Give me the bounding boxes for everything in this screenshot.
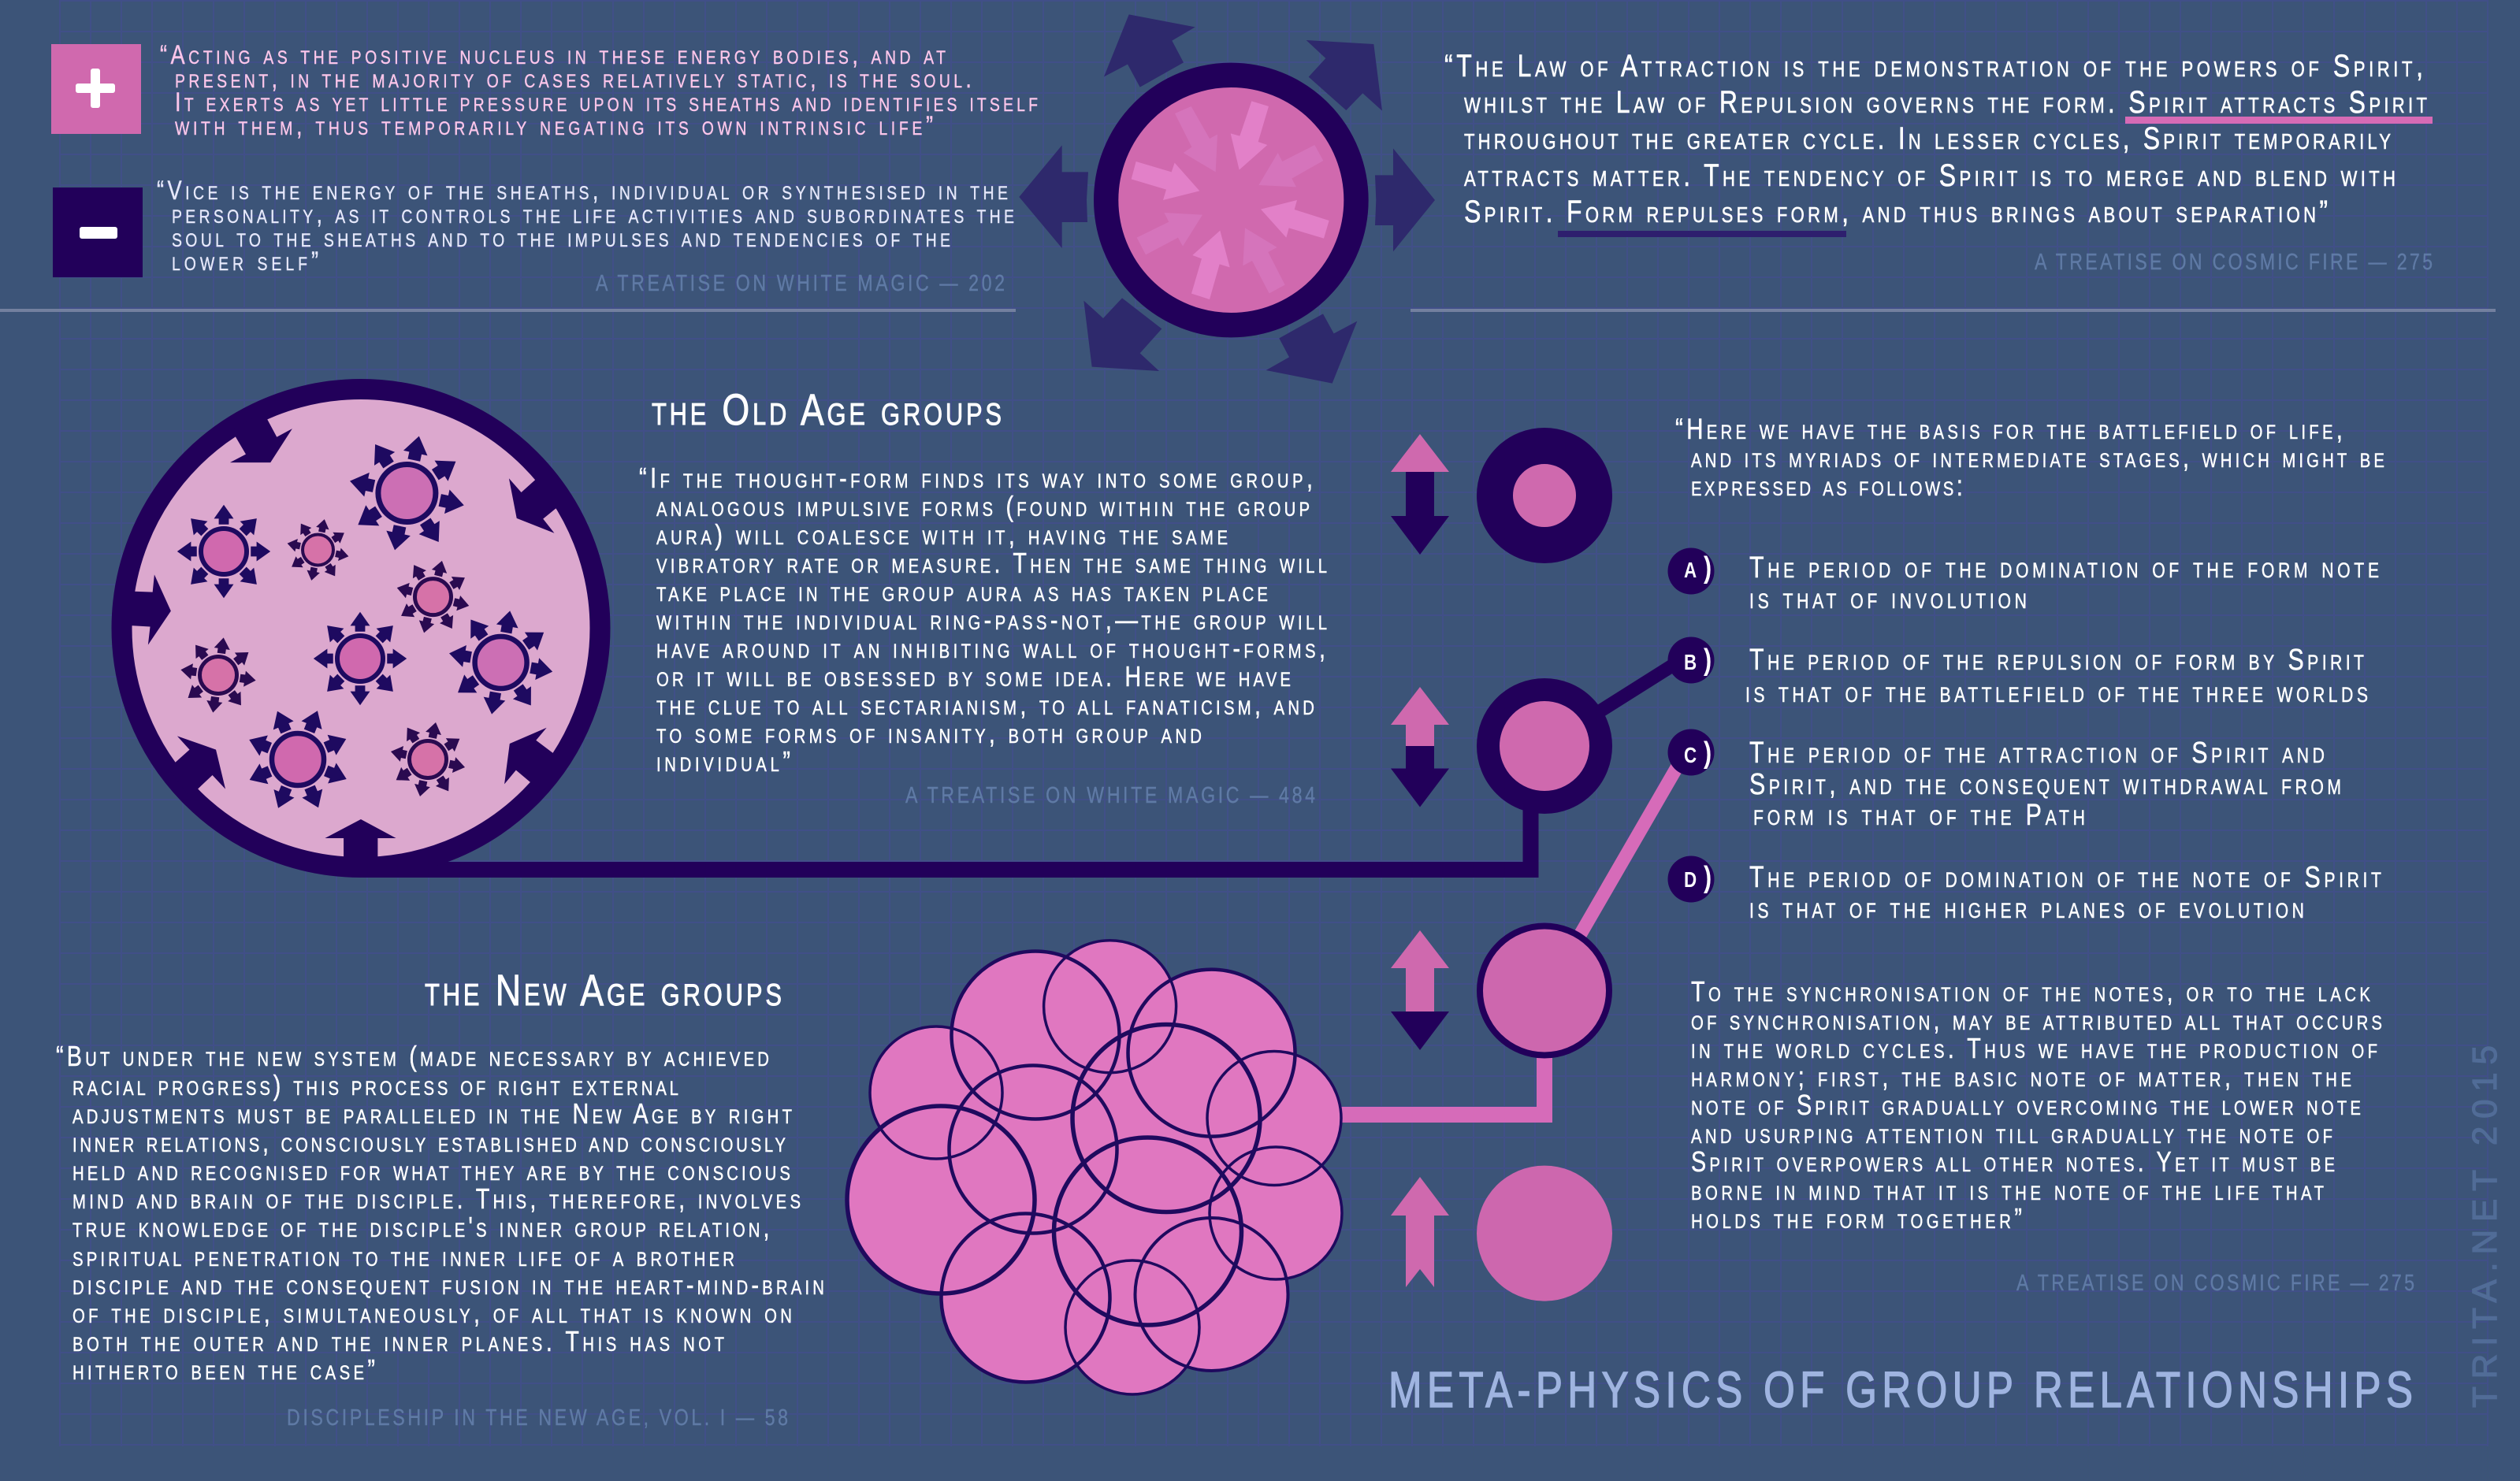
arrow: balanced bbox=[1391, 687, 1449, 807]
source: white magic 484: A TREATISE ON WHITE MAGIC — 484 bbox=[905, 781, 1315, 808]
item C: Spirit, and the consequent withdrawal from bbox=[1749, 768, 2341, 801]
quote: law of attraction: “The Law of Attraction is the demonstration of the powers of Spirit, bbox=[1444, 48, 2423, 84]
quote: law of attraction: Spirit. Form repulses form, and thus brings about separation” bbox=[1464, 194, 2328, 229]
quote: vice: personality, as it controls the life activities and subordinates the bbox=[172, 199, 1014, 229]
item D: is that of the higher planes of evolution bbox=[1749, 892, 2304, 925]
old age group circle bbox=[121, 389, 600, 867]
item A bbox=[1749, 551, 2379, 615]
outer arrows bbox=[1019, 14, 1435, 384]
quote: new system: mind and brain of the disciple. This, therefore, involves bbox=[72, 1182, 801, 1215]
member cell 3 bbox=[281, 513, 355, 587]
quote: synchronisation: note of Spirit gradually overcoming the lower note bbox=[1691, 1089, 2361, 1121]
source: discipleship 58: DISCIPLESHIP IN THE NEW AGE, VOL. I — 58 bbox=[287, 1404, 788, 1431]
underline: spirit attracts spirit bbox=[2125, 117, 2433, 124]
quote: new system bbox=[56, 1040, 824, 1386]
credit: vertical watermark: TRITA.NET 2015 bbox=[2466, 1045, 2504, 1408]
quote: thought-form: analogous impulsive forms (found within the group bbox=[656, 490, 1310, 522]
quote: thought-form bbox=[639, 462, 1327, 778]
quote: new system: true knowledge of the disciple's inner group relation, bbox=[72, 1211, 769, 1243]
badge B: B) bbox=[1684, 644, 1712, 677]
quote: synchronisation: and usurping attention till gradually the note of bbox=[1691, 1117, 2332, 1149]
member cell 8 bbox=[229, 691, 366, 828]
quote: new system: adjustments must be paralleled in the New Age by right bbox=[72, 1097, 792, 1130]
item C: form is that of the Path bbox=[1753, 799, 2085, 832]
quote: thought-form: or it will be obsessed by some idea. Here we have bbox=[656, 660, 1291, 692]
item D bbox=[1749, 861, 2381, 925]
quote: new system: inner relations, consciously established and consciously bbox=[72, 1126, 786, 1158]
arrow: mostly upward bbox=[1391, 930, 1449, 1050]
quote: new system: “But under the new system (made necessary by achieved bbox=[56, 1040, 769, 1072]
quote: vice: lower self” bbox=[172, 246, 318, 277]
connector: old age bar bbox=[362, 788, 1530, 870]
arrow: upward only bbox=[1391, 1177, 1449, 1287]
badge B bbox=[1667, 637, 1715, 684]
quote: positive nucleus: present, in the majority of cases relatively static, is the soul. bbox=[175, 63, 972, 94]
source: cosmic fire 275 top: A TREATISE ON COSMIC FIRE — 275 bbox=[2035, 248, 2433, 275]
quote: synchronisation: To the synchronisation of the notes, or to the lack bbox=[1691, 975, 2371, 1008]
quote: new system: both the outer and the inner planes. This has not bbox=[72, 1325, 724, 1357]
quote: thought-form: individual” bbox=[656, 745, 790, 778]
new age group cluster bbox=[847, 941, 1342, 1394]
item C: The period of the attraction of Spirit and bbox=[1749, 737, 2325, 770]
icon: minus square bbox=[53, 187, 143, 277]
quote: law of attraction bbox=[1444, 48, 2427, 229]
quote: battlefield: and its myriads of intermediate stages, which might be bbox=[1691, 442, 2384, 474]
quote: synchronisation: of synchronisation, may be attributed all that occurs bbox=[1691, 1004, 2382, 1036]
member cell 7 bbox=[176, 633, 261, 718]
item B: is that of the battlefield of the three worlds bbox=[1745, 676, 2368, 709]
badge D bbox=[1667, 856, 1715, 903]
member cell 1 bbox=[338, 424, 476, 562]
connector: pink line to badge C bbox=[1580, 763, 1679, 935]
quote: thought-form: the clue to all sectarianism, to all fanaticism, and bbox=[656, 689, 1314, 721]
quote: battlefield: expressed as follows: bbox=[1691, 470, 1963, 503]
quote: positive nucleus: “Acting as the positive nucleus in these energy bodies, and at bbox=[160, 39, 946, 70]
quote: law of attraction: attracts matter. The tendency of Spirit is to merge and blend with bbox=[1464, 158, 2395, 193]
inner arrows bright bbox=[1132, 101, 1329, 299]
badge C: C) bbox=[1684, 737, 1712, 770]
underline: form repulses form bbox=[1558, 231, 1846, 237]
member cell 5 bbox=[314, 612, 407, 705]
quote: new system: disciple and the consequent fusion in the heart-mind-brain bbox=[72, 1268, 824, 1301]
quote: thought-form: take place in the group aura as has taken place bbox=[656, 575, 1268, 607]
divider left bbox=[0, 309, 1016, 312]
quote: synchronisation: in the world cycles. Thus we have the production of bbox=[1691, 1032, 2377, 1064]
badge A: A) bbox=[1684, 551, 1712, 585]
quote: vice: “Vice is the energy of the sheaths, individual or synthesised in the bbox=[157, 175, 1008, 206]
member cell 2 bbox=[177, 505, 270, 598]
quote: thought-form: have around it an inhibiting wall of thought-forms, bbox=[656, 632, 1325, 664]
member cell 9 bbox=[383, 715, 473, 804]
quote: positive nucleus: with them, thus temporarily negating its own intrinsic life” bbox=[175, 110, 933, 141]
quote: new system: held and recognised for what they are by the conscious bbox=[72, 1154, 790, 1186]
quote: new system: hitherto been the case” bbox=[72, 1353, 375, 1386]
stage circle 4 bbox=[1477, 1166, 1612, 1301]
quote: thought-form: aura) will coalesce with it, having the same bbox=[656, 518, 1228, 551]
quote: synchronisation: harmony; first, the basic note of matter, then the bbox=[1691, 1060, 2351, 1093]
badge C bbox=[1667, 729, 1715, 775]
inner arrows soft bbox=[1137, 106, 1323, 293]
inward arrows bbox=[126, 412, 566, 863]
disc bbox=[121, 389, 600, 867]
item A: The period of the domination of the form note bbox=[1749, 551, 2379, 585]
icon: plus square bbox=[51, 44, 141, 134]
quote: vice: soul to the sheaths and to the impulses and tendencies of the bbox=[172, 222, 950, 253]
quote: synchronisation: holds the form together” bbox=[1691, 1202, 2022, 1234]
quote: new system: of the disciple, simultaneously, of all that is known on bbox=[72, 1297, 792, 1329]
title: META-PHYSICS OF GROUP RELATIONSHIPS bbox=[1388, 1363, 2413, 1418]
central radiating soul diagram bbox=[1019, 14, 1435, 384]
stage circle 3 bbox=[1480, 926, 1609, 1056]
quote: new system: spiritual penetration to the inner life of a brother bbox=[72, 1240, 734, 1272]
quote: battlefield: “Here we have the basis for the battlefield of life, bbox=[1675, 414, 2343, 446]
quote: vice bbox=[157, 175, 1014, 277]
connector: dark line to badge B bbox=[1576, 662, 1678, 726]
source: cosmic fire 275 bottom: A TREATISE ON COSMIC FIRE — 275 bbox=[2016, 1269, 2414, 1296]
heading: new age groups: the New Age groups bbox=[425, 965, 782, 1015]
quote: synchronisation: Spirit overpowers all other notes. Yet it must be bbox=[1691, 1145, 2335, 1178]
quote: law of attraction: whilst the Law of Repulsion governs the form. Spirit attracts Spirit bbox=[1464, 84, 2427, 120]
badge D: D) bbox=[1684, 861, 1712, 894]
quote: synchronisation bbox=[1691, 975, 2382, 1234]
quote: thought-form: to some forms of insanity, both group and bbox=[656, 717, 1202, 749]
stage circle 2 bbox=[1488, 690, 1601, 802]
divider right bbox=[1411, 309, 2496, 312]
quote: synchronisation: borne in mind that it is the note of the life that bbox=[1691, 1174, 2324, 1206]
item B bbox=[1745, 644, 2368, 709]
item D: The period of domination of the note of Spirit bbox=[1749, 861, 2381, 894]
item C bbox=[1749, 737, 2341, 832]
quote: law of attraction: throughout the greater cycle. In lesser cycles, Spirit temporarily bbox=[1464, 121, 2391, 156]
quote: thought-form: vibratory rate or measure. Then the same thing will bbox=[656, 547, 1327, 579]
quote: thought-form: within the individual ring-pass-not,—the group will bbox=[656, 603, 1327, 636]
quote: positive nucleus bbox=[160, 39, 1038, 141]
member cell 6 bbox=[440, 602, 562, 723]
stage circle 1 bbox=[1495, 446, 1594, 545]
item B: The period of the repulsion of form by Spirit bbox=[1749, 644, 2364, 677]
connector: pink line from cluster to circle bbox=[1332, 1048, 1544, 1115]
badge A bbox=[1667, 548, 1715, 594]
arrow: mostly downward bbox=[1391, 434, 1449, 555]
quote: positive nucleus: It exerts as yet little pressure upon its sheaths and identifies itself bbox=[175, 87, 1038, 117]
item A: is that of involution bbox=[1749, 582, 2027, 615]
member cell 4 bbox=[388, 551, 478, 642]
quote: thought-form: “If the thought-form finds its way into some group, bbox=[639, 462, 1313, 494]
heading: old age groups: the Old Age groups bbox=[652, 384, 1002, 434]
quote: battlefield bbox=[1675, 414, 2384, 503]
source: white magic 202: A TREATISE ON WHITE MAGIC — 202 bbox=[596, 269, 1005, 296]
ringed core bbox=[1106, 75, 1356, 325]
quote: new system: racial progress) this process of right external bbox=[72, 1069, 678, 1101]
